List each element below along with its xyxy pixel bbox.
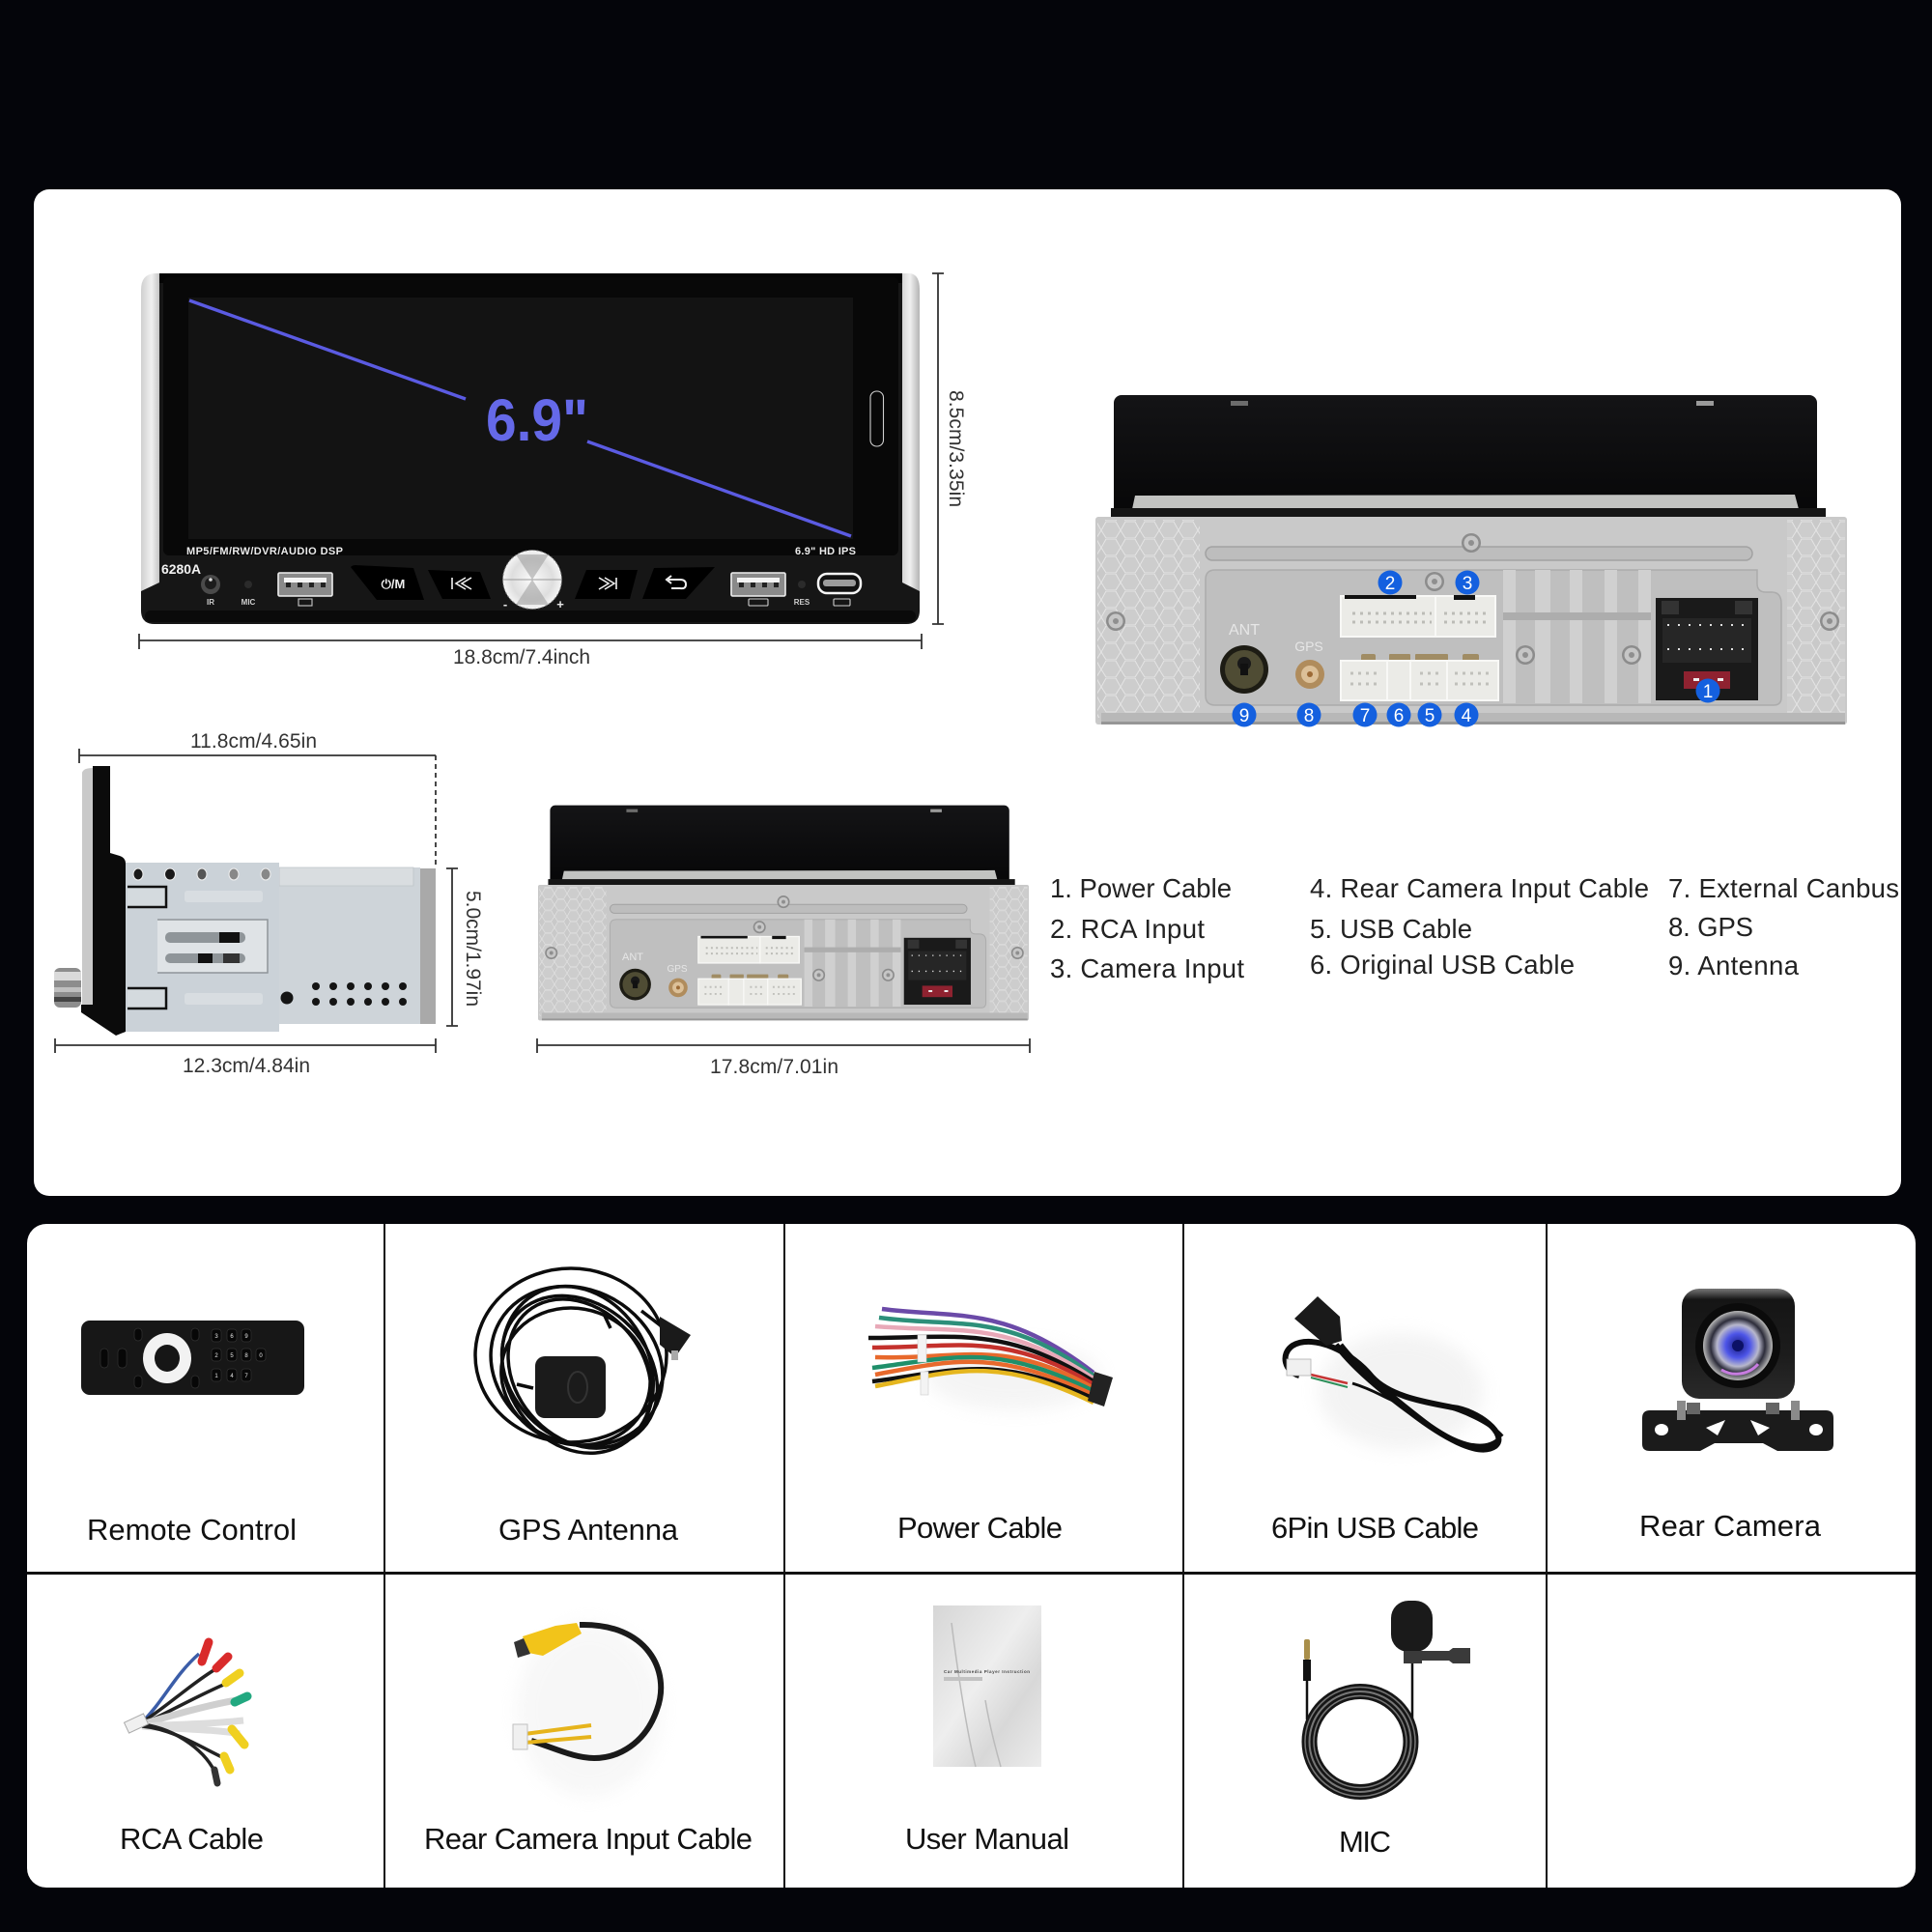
number badges: 3 bbox=[1463, 574, 1472, 594]
screen caption right: 6.9" HD IPS bbox=[795, 546, 856, 557]
volume knob: + bbox=[556, 597, 564, 611]
label: MIC bbox=[1339, 1825, 1391, 1859]
dimension: chassis height bbox=[446, 868, 484, 1026]
small rear view bbox=[538, 806, 1029, 1020]
item: MIC bbox=[1303, 1601, 1470, 1859]
item: power cable bbox=[868, 1309, 1113, 1545]
dimension: total depth: 12.3cm/4.84in bbox=[183, 1055, 310, 1077]
icon: manual: Car Multimedia Player Instruction bbox=[944, 1669, 1030, 1674]
pressed ribs bbox=[185, 891, 263, 1005]
home pill bbox=[870, 391, 883, 446]
lower edge bbox=[145, 611, 916, 622]
MIC hole bbox=[242, 581, 256, 607]
volume knob: - bbox=[503, 597, 507, 611]
previous button bbox=[428, 570, 491, 599]
icon: remote: 8 bbox=[244, 1353, 248, 1359]
dimension: chassis width bbox=[537, 1038, 1030, 1078]
rear casing bbox=[279, 867, 420, 1024]
icon: RCA harness bbox=[124, 1642, 247, 1783]
number badges: 4 bbox=[1462, 706, 1472, 726]
end plate bbox=[420, 868, 436, 1024]
port legend: 9. Antenna bbox=[1668, 951, 1800, 980]
icon: camera input cable bbox=[513, 1623, 662, 1797]
screen caption left: MP5/FM/RW/DVR/AUDIO DSP bbox=[186, 546, 343, 557]
number badges: 2 bbox=[1385, 574, 1395, 594]
item: remote control bbox=[81, 1321, 304, 1547]
power mode button bbox=[351, 565, 424, 600]
silver side trims bbox=[141, 273, 920, 591]
MIC hole: MIC bbox=[242, 598, 256, 607]
dimension: screen width bbox=[139, 634, 922, 668]
item: 6pin USB cable bbox=[1271, 1296, 1502, 1545]
small ANT label: ANT bbox=[622, 952, 643, 963]
port legend: 4. Rear Camera Input Cable bbox=[1310, 873, 1649, 903]
center latch bbox=[157, 920, 268, 973]
dimension: depth with screen bbox=[79, 730, 436, 867]
icon: remote: 1 bbox=[214, 1374, 218, 1379]
back button bbox=[642, 567, 715, 599]
number badges: 5 bbox=[1425, 706, 1435, 726]
icon: camera bbox=[1642, 1289, 1833, 1451]
icon: USB cable bbox=[1286, 1296, 1502, 1450]
screen size: 6.9" bbox=[486, 387, 588, 453]
label: User Manual bbox=[905, 1822, 1069, 1856]
icon: remote: 5 bbox=[230, 1353, 234, 1359]
port legend: 5. USB Cable bbox=[1310, 914, 1472, 944]
number badges: 9 bbox=[1239, 706, 1249, 726]
dimension: depth with screen: 11.8cm/4.65in bbox=[190, 730, 317, 753]
small GPS label: GPS bbox=[667, 964, 688, 975]
dimension: total depth bbox=[55, 1038, 436, 1077]
label: GPS Antenna bbox=[498, 1513, 679, 1547]
USB port left bbox=[278, 573, 332, 606]
dimension: screen height bbox=[932, 273, 967, 624]
port legend: 6. Original USB Cable bbox=[1310, 950, 1575, 980]
RES hole: RES bbox=[794, 598, 810, 607]
volume knob bbox=[502, 551, 564, 611]
port legend: 1. Power Cable bbox=[1050, 873, 1232, 903]
number badges: 7 bbox=[1360, 706, 1370, 726]
dimension: screen height: 8.5cm/3.35in bbox=[945, 390, 967, 507]
port legend: 2. RCA Input bbox=[1050, 914, 1205, 944]
volume knob side bbox=[54, 968, 81, 1008]
port legend: 3. Camera Input bbox=[1050, 953, 1244, 983]
icon: remote bbox=[81, 1321, 304, 1395]
icon: remote: 7 bbox=[244, 1374, 248, 1379]
number badges bbox=[1233, 570, 1719, 726]
model number: 6280A bbox=[161, 561, 201, 577]
screen bbox=[188, 298, 853, 539]
label: RCA Cable bbox=[120, 1822, 264, 1856]
panel: dimensions and ports bbox=[34, 189, 1901, 1196]
dimension: chassis width: 17.8cm/7.01in bbox=[710, 1056, 838, 1078]
item: RCA cable bbox=[120, 1642, 264, 1856]
IR sensor: IR bbox=[207, 598, 214, 607]
next button bbox=[575, 570, 638, 599]
dimension: chassis height: 5.0cm/1.97in bbox=[462, 891, 484, 1007]
item: user manual bbox=[905, 1605, 1069, 1856]
icon: remote: 6 bbox=[230, 1334, 234, 1340]
casing top band bbox=[279, 867, 413, 886]
label: 6Pin USB Cable bbox=[1271, 1511, 1479, 1545]
port legend: 8. GPS bbox=[1668, 912, 1753, 942]
lower clip bbox=[128, 988, 166, 1009]
port legend: 7. External Canbus bbox=[1668, 873, 1899, 903]
unit body bbox=[141, 273, 920, 624]
item: rear camera bbox=[1639, 1289, 1833, 1543]
icon: remote: 2 bbox=[214, 1353, 218, 1359]
side view of head unit bbox=[54, 766, 436, 1036]
rear view with numbered ports bbox=[1095, 395, 1847, 726]
power mode button: ⏻/M bbox=[382, 577, 405, 591]
USB-C port bbox=[818, 574, 861, 606]
silver front edge bbox=[82, 768, 93, 1007]
icon: remote: 9 bbox=[244, 1334, 248, 1340]
USB port right bbox=[731, 573, 785, 606]
grid lines bbox=[27, 1224, 1916, 1888]
label: Power Cable bbox=[897, 1511, 1063, 1545]
RES hole bbox=[794, 581, 810, 607]
item: rear camera input cable bbox=[424, 1623, 753, 1856]
item: GPS antenna bbox=[462, 1256, 692, 1547]
screen bezel bbox=[163, 277, 898, 555]
label: Rear Camera bbox=[1639, 1509, 1822, 1543]
dimension: screen width: 18.8cm/7.4inch bbox=[453, 646, 590, 668]
number badges: 6 bbox=[1394, 706, 1404, 726]
icon: remote: 3 bbox=[214, 1334, 218, 1340]
label: Rear Camera Input Cable bbox=[424, 1822, 753, 1856]
icon: GPS antenna bbox=[462, 1256, 692, 1481]
mounting holes bbox=[133, 868, 270, 880]
front view of head unit bbox=[141, 273, 920, 624]
side bracket bbox=[126, 863, 279, 1032]
vent holes bbox=[280, 982, 407, 1006]
icon: lavalier microphone bbox=[1303, 1601, 1470, 1797]
icon: remote: 0 bbox=[259, 1353, 263, 1359]
black front housing bbox=[81, 766, 126, 1036]
number badges: 8 bbox=[1304, 706, 1314, 726]
number badges: 1 bbox=[1703, 682, 1713, 702]
upper clip bbox=[128, 887, 166, 907]
panel: package contents bbox=[27, 1224, 1916, 1888]
top frame bbox=[159, 273, 902, 283]
ANT label: ANT bbox=[1229, 622, 1260, 639]
port legend bbox=[1050, 873, 1899, 983]
icon: remote: 4 bbox=[230, 1374, 234, 1379]
icon: manual bbox=[933, 1605, 1041, 1767]
diagonal size line bbox=[189, 300, 851, 536]
IR sensor bbox=[201, 575, 220, 607]
label: Remote Control bbox=[87, 1513, 297, 1547]
GPS label: GPS bbox=[1294, 639, 1323, 654]
icon: wiring harness bbox=[868, 1309, 1113, 1410]
